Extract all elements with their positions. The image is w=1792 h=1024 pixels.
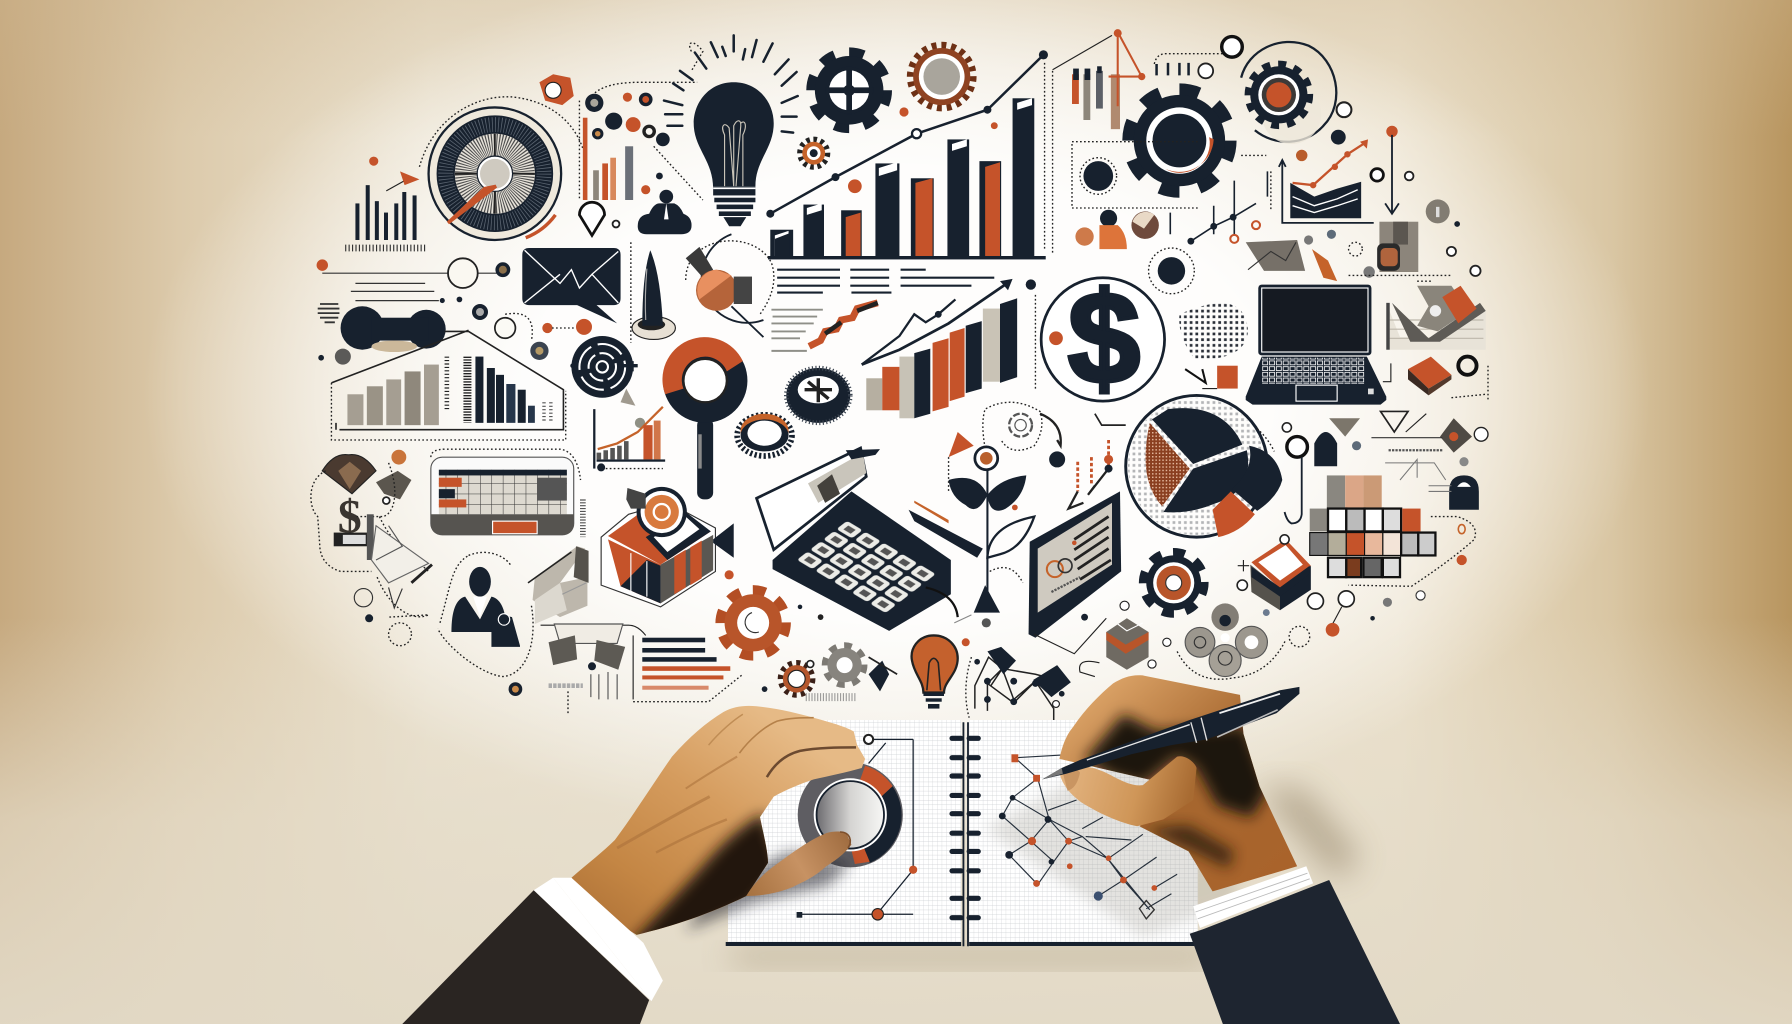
icon: box with magnifier [601, 487, 734, 607]
icon: calculator [757, 448, 983, 631]
icon: right dotted connector [1307, 517, 1475, 637]
icon: gray gear and small gear [762, 646, 897, 711]
icon: light bulb [664, 35, 798, 226]
icon: person in cloud [638, 190, 692, 234]
icon: dumbbell connector [318, 306, 446, 365]
icon: small bar chart [345, 157, 426, 248]
panel: bars and dots [579, 82, 703, 200]
3D bar chart [862, 279, 1017, 418]
icon: orange bulb [912, 635, 970, 709]
icon: node network [966, 647, 1071, 720]
icon: growing plant [949, 402, 1126, 627]
hand: left sleeve and cuff [402, 878, 663, 1024]
icon: black gear with orange core [1144, 553, 1203, 613]
icon: big gear [1131, 93, 1227, 189]
chart: big pie [1126, 395, 1282, 537]
icon: magnifying glass [662, 337, 747, 499]
hand: right sleeve and cuff [1190, 866, 1400, 1024]
icon: padlocks and triangles [1314, 411, 1488, 510]
icon: folded paper [528, 546, 603, 640]
panel: dotted box with circle [1072, 142, 1266, 208]
icon: orange brick and ring [1383, 357, 1488, 400]
icon: envelope [522, 248, 621, 323]
icon: orange gear [722, 570, 823, 654]
icon: tire [786, 368, 850, 423]
panel: house chart [331, 330, 566, 440]
chart: small ascending bars [594, 407, 665, 471]
hand: left hand [571, 706, 865, 954]
icon: left connector lines [317, 258, 592, 360]
icon: tick marks and connector [1154, 37, 1242, 78]
icon: pen [1042, 687, 1299, 779]
icon: small gear black orange [800, 139, 827, 167]
icon: target spiral [570, 336, 638, 406]
icon: laptop [1246, 285, 1386, 405]
panel: keyboard block [431, 449, 583, 537]
text lines and staircase [771, 270, 994, 351]
icon: tablet [1029, 491, 1121, 638]
bar chart: main growth chart [766, 50, 1053, 259]
icon: map pin [579, 202, 619, 235]
icon: gray shapes cluster [1246, 199, 1481, 281]
icon: orange ring gear [911, 46, 973, 107]
icon: open letter [367, 514, 432, 583]
icon: circles and down arrow [1331, 102, 1413, 214]
icon: cube [1237, 535, 1311, 610]
icon: dollar sign in circle: $ [1068, 265, 1140, 411]
icon: layered chip [1034, 601, 1171, 677]
icon: orange badge [539, 74, 574, 105]
icon: squares grid [1310, 475, 1435, 577]
icon: dial fan [419, 97, 583, 240]
icon: folder documents [1386, 281, 1486, 350]
icon: figures and line graph [1075, 171, 1271, 249]
icon: sphere and dotted mesh [1149, 248, 1248, 389]
chart: notebook donut diagram [797, 735, 917, 920]
icon: gray flowers [1177, 603, 1310, 679]
chart: notebook network sketch [985, 709, 1246, 937]
hand: right hand [1059, 675, 1360, 891]
chart: pie with ball [686, 234, 774, 337]
icon: spiral notebook [726, 720, 1198, 946]
icon: circled gear [1241, 42, 1336, 144]
shadow: desk shadow [731, 946, 1211, 966]
icon: pens and triangle [1053, 29, 1145, 129]
icon: navy gear [811, 53, 887, 128]
icon: envelope with clips [509, 624, 646, 714]
icon: hook ring [1282, 423, 1307, 523]
icon: pencil obelisk [631, 242, 675, 343]
icon: dollar group left [311, 450, 429, 646]
panel: striped list [633, 635, 743, 702]
icon: dollar sign in circle [1026, 265, 1165, 411]
icon: mini line chart [1279, 139, 1374, 223]
icon: gear ring [737, 414, 792, 456]
icon: dollar group left: $ [338, 491, 362, 544]
icon: businessman [438, 552, 533, 677]
